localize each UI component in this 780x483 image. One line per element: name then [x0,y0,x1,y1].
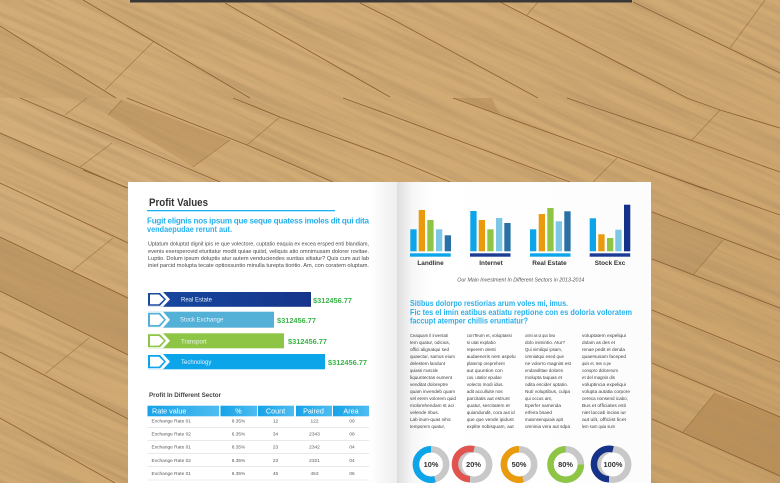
text column 2: cus, utatior epudae [467,375,502,381]
text column 3: molupta taquas et [525,375,563,381]
body paragraph: evenis exersperovid eturitatur modit quiae quiist, veliquis atio omnimusam dolorer rovitae. [148,249,369,255]
bar: real estate [148,292,352,307]
text column 3: endandittae dolores [525,368,564,374]
text column 2: audaeneris nem aspelu [467,354,516,360]
bar chart: real estate: Real Estate [532,260,567,267]
text column 4: dolam as des et [582,340,616,346]
text column 1: molorehendam st aci [410,403,454,409]
text column 4: et del magnis dis [582,375,616,381]
table header row: Rate value [152,407,186,416]
text column 2: que que vende ipidunt [467,417,514,423]
table rows: 45 [273,471,278,477]
text column 3: erfeira bsaed [525,410,552,416]
table rows: 06 [349,471,355,477]
text column 1: tem quatur, odicius, [410,340,450,346]
text column 1: Ceaquam Il inventati [410,333,448,339]
bar: technology [148,354,367,369]
text column 1: offici alignatqui sed [410,347,449,353]
text column 1: quiassi muscide [410,368,438,374]
text column 1: delestem landunt [410,361,446,367]
table header row: Count [266,407,285,416]
table heading: Profit In Different Sector [149,392,221,399]
bar chart: landline [410,210,451,267]
blue heading text: Fic tes el imin eatibus eatiatu reptione con es doloria voloratem [410,308,632,317]
text column 2: quatur, sercitatem et [467,403,510,409]
text column 1 [410,333,456,430]
blue heading text [410,299,632,326]
table rows: Exchange Rate 01 [152,418,191,424]
table header row [148,406,369,416]
text column 3: Eperfer namenda [525,403,561,409]
text column 2: platemp oreprehent [467,361,505,367]
text column 2: aut quuntion con [467,368,503,374]
text column 4: volupta autatia corpore [582,389,630,395]
text column 2: conTeum et, voluptassi [467,333,512,339]
table rows: 04 [349,458,355,464]
table rows: 8.35% [232,458,246,464]
table rows: Exchange Rate 02 [152,458,191,464]
text column 3: ne volorro magnist est [525,361,572,367]
table rows: 23 [273,458,278,464]
text column 3: Nuti voluptibus, culpa [525,389,570,395]
blue intro text: vendaepudae rerunt aut. [147,225,232,234]
table rows: 122 [310,418,319,424]
bar: real estate: $312456.77 [313,296,352,305]
table rows: 12 [273,418,278,424]
text column 3 [525,333,572,430]
heading: profit values: Profit Values [149,197,208,209]
table rows: 8.35% [232,418,246,424]
table rows: Exchange Rate 02 [152,432,191,438]
text column 4: quis et, tem a pe [582,361,611,367]
text column 1: venditat doloreptre [410,382,448,388]
text column 2: reperem olesti [467,347,496,353]
blue intro text [147,216,369,234]
text column 1: liquuntectas eument [410,375,453,381]
bar chart: landline: Landline [417,260,444,267]
text column 3: Qui nimiliqui ipsam, [525,347,562,353]
table rows: 2343 [309,432,320,438]
body paragraph: Uptatum doluptat dignit ipis re que volectore, cuptatio eaquia ex excea ersped enti blandiam, [148,242,369,248]
text column 4: aut ulit, officiist licet [582,417,627,423]
table rows: Exchange Rate 01 [152,471,191,477]
text column 1: temporem quatur, [410,424,445,430]
table rows [152,418,355,477]
table rows: 04 [349,445,355,451]
blue heading text: faccupt atemper chillis eruntiatur? [410,317,528,326]
table rows: 23 [273,445,278,451]
bar: stock exchange: Stock Exchange [180,318,224,324]
text column 3: odita escider uptatio. [525,382,568,388]
donut: 100% [594,449,628,480]
text column 4: conopro dolorerum [582,368,618,374]
donut: 10%: 10% [424,460,439,469]
bar: stock exchange [148,312,316,328]
table rows: 2342 [309,445,320,451]
text column 2: adit acculluite nos [467,389,503,395]
bar chart: internet [470,211,511,267]
text column 3: unmi as ut quo bea [525,333,555,339]
text column 2: quiandundit, cora aut id [467,410,515,416]
text column 1: quam invendeb quam [410,389,455,395]
donut: 80% [550,449,581,480]
donut: 50% [504,449,534,480]
donut: 100%: 100% [604,460,623,469]
table rows: 2321 [309,458,320,464]
bar: real estate: Real Estate [181,298,213,304]
bar chart: stock exc [590,205,630,267]
text column 1: quaectur, samus eium [410,354,455,360]
text column 4: voluptincia expeliqui [582,382,626,388]
table rows: 08 [349,432,355,438]
text column 3: dolo inimintio. Atur? [525,340,565,346]
body paragraph [148,242,369,269]
table header row: Area [343,407,359,416]
table rows: 453 [310,471,319,477]
bar chart: stock exc: Stock Exc [595,260,626,267]
text column 4: niet laccab incias iur [582,410,626,416]
top edge of dark book [130,0,632,2]
donut: 50%: 50% [512,460,527,469]
bar chart: internet: Internet [479,260,504,267]
text column 2: si utat explabo [467,340,496,346]
text column 2: explite nobisquam, aut [467,424,514,430]
donut: 10% [416,449,446,480]
text column 3: qui occus ant, [525,396,552,402]
text column 1: vel erem volorem quid [410,396,456,402]
text column 1: velende ribus. [410,410,439,416]
left page [128,182,397,483]
text column 4: lem sum quia sum [582,424,615,430]
body paragraph: Luptio. Dolum ipsum doluptis atur autem venduciendes suntias sitiatur? Quis cum aut lab [148,256,369,262]
table rows: 6.35% [232,471,246,477]
bar: transport [148,333,327,348]
bar: stock exchange: $312456.77 [277,316,316,325]
table rows: 34 [273,432,278,438]
table rows: 8.35% [232,445,246,451]
table header row: Paired [303,407,324,416]
table rows: 09 [349,418,355,424]
bar: transport: $312456.77 [288,337,327,346]
text column 4: voluptatem expeliqui [582,333,626,339]
blue intro text: Fugit elignis nos ipsum que seque quatess imoles dit qui dita [147,216,369,226]
table header row: % [235,407,242,416]
profit table [148,406,369,480]
bar chart: real estate [530,208,571,267]
text column 4: renae pedit et denda [582,347,625,353]
text column 4: Bus et officiates esti [582,403,626,409]
text column 4: cereca nonsend icabo, [582,396,628,402]
donut: 80%: 80% [558,460,573,469]
text column 4 [582,333,630,430]
text column 3: omninia vera aut sdpa [525,424,570,430]
text column 2 [467,333,516,430]
chart caption: Our Main Investment In Different Sectors in 2013-2014 [457,278,584,284]
text column 1: Lab inum-quas nihic [410,417,452,423]
donut: 20% [455,449,489,480]
donut: 20%: 20% [466,460,481,469]
bar: technology: Technology [181,360,211,366]
bar: transport: Transport [181,340,207,346]
bar: technology: $312456.77 [328,358,367,367]
text column 4: quaersusam faceped [582,354,626,360]
blue heading text: Sitibus dolorpo restiorias arum voles mi, imus. [410,299,568,308]
text column 2: parcitatis aut estrunt [467,396,510,402]
table rows: 6.35% [232,432,246,438]
text column 3: omniatqui esed que [525,354,564,360]
text column 2: volecto modi idus. [467,382,504,388]
body paragraph: iniet parcid molupta tecate optiossuntio minulla turepta tioritio. Am, con coratem oluptam. [148,263,369,269]
text column 3: maionsenquiais apit [525,417,564,423]
right page [397,182,651,483]
table rows: Exchange Rate 01 [152,445,191,451]
